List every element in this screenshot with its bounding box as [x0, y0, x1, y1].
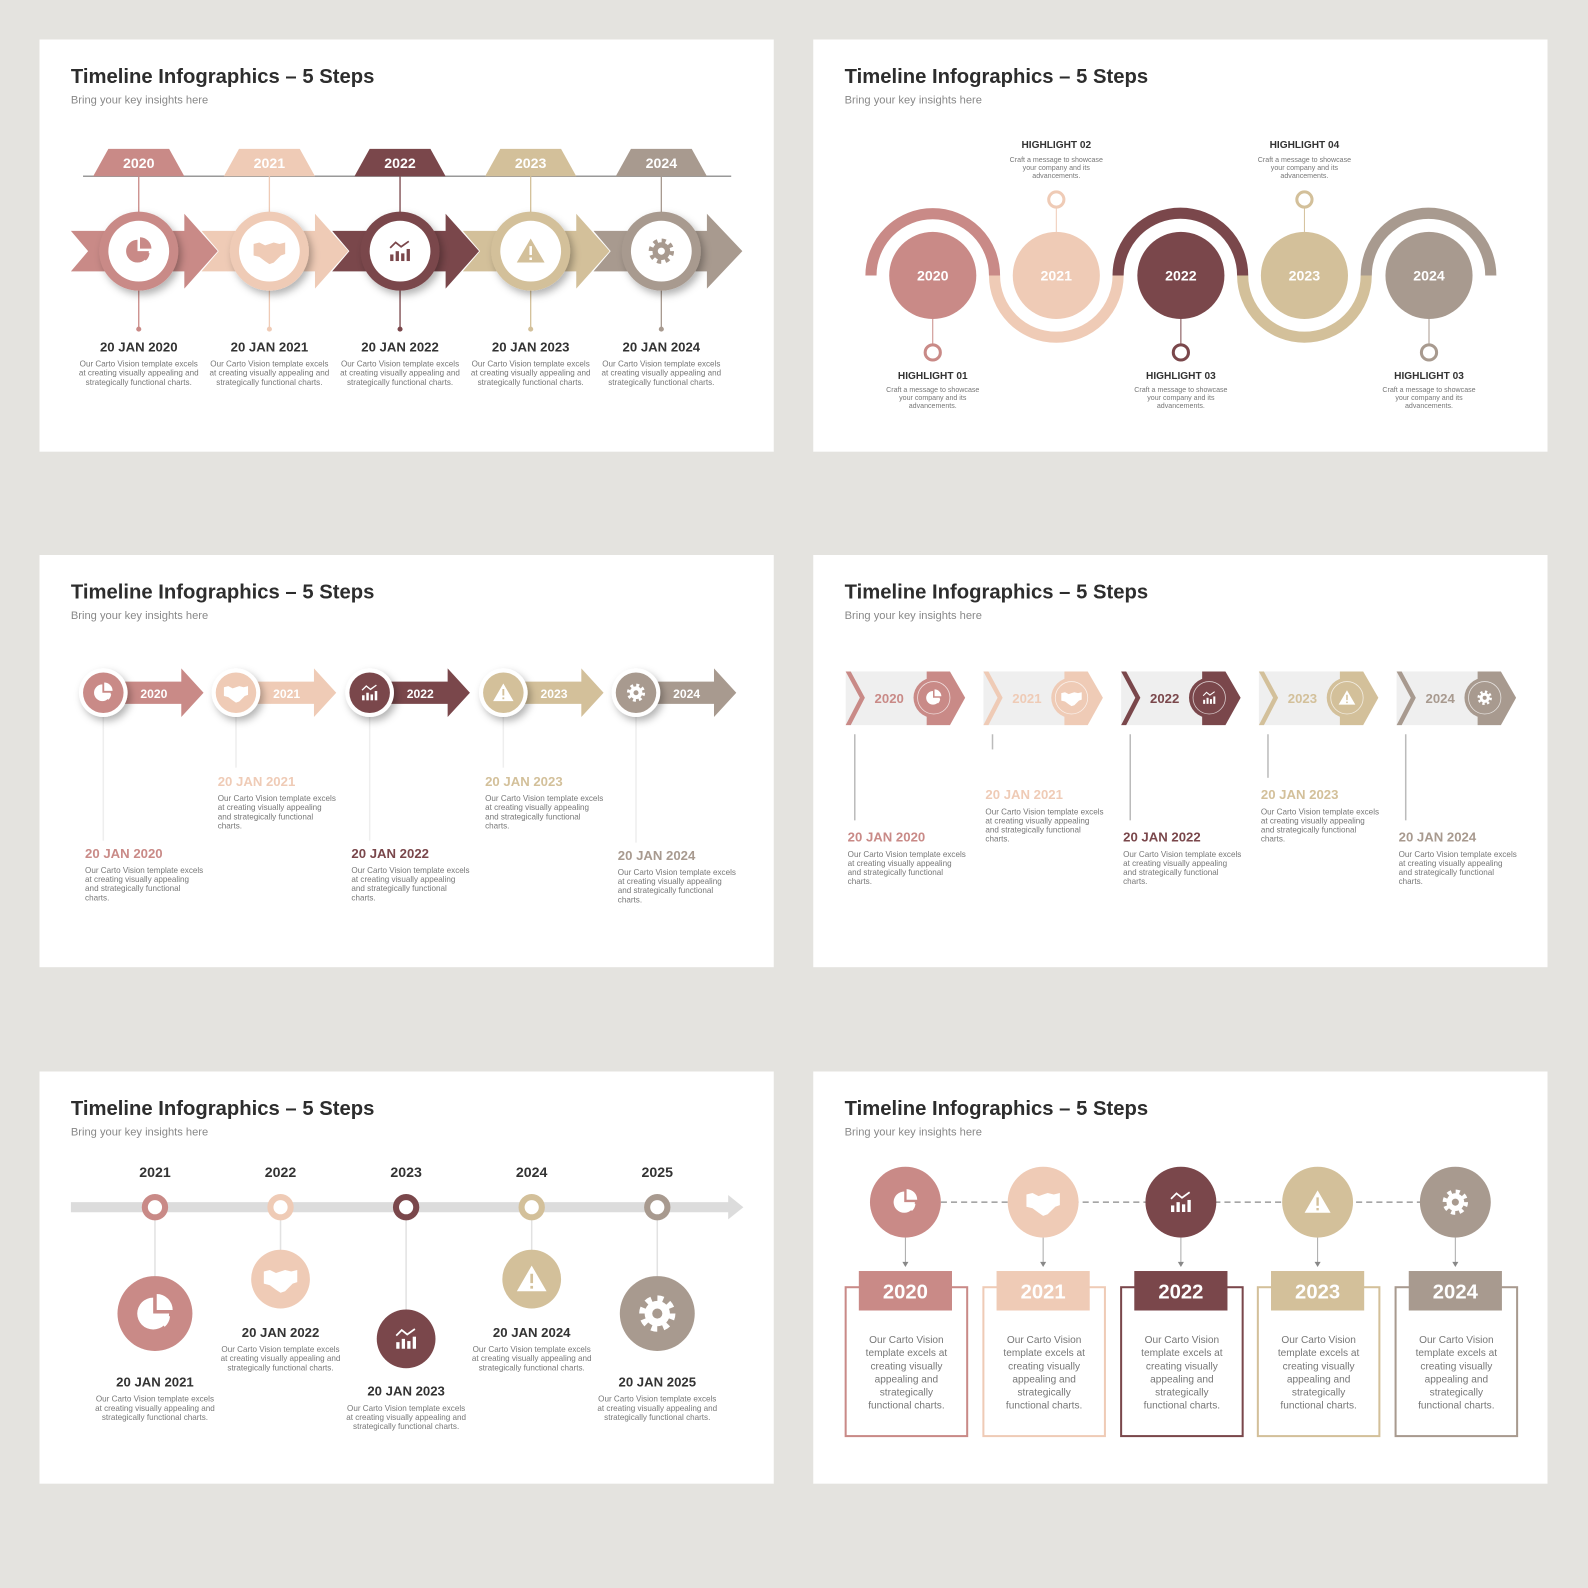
subtitle: Bring your key insights here	[71, 610, 208, 622]
step 2020: 2020	[140, 687, 168, 701]
step 2022: Our Carto Vision	[1145, 1335, 1219, 1346]
step 2023: Our Carto Vision	[1281, 1335, 1356, 1346]
step 2025: strategically functional charts.	[604, 1413, 710, 1422]
step 2022: charts.	[1123, 877, 1147, 886]
highlight 02: HIGHLIGHT 02	[1021, 140, 1092, 151]
step 2024: 20 JAN 2024	[493, 1325, 571, 1340]
step 2024: Our Carto Vision template excels	[602, 360, 720, 369]
step 2024	[593, 149, 742, 387]
step 2024	[472, 1165, 592, 1372]
highlight 03: 2022	[1165, 269, 1197, 285]
step 2022: creating visually	[1146, 1361, 1219, 1372]
step 2020: 20 JAN 2020	[100, 339, 178, 354]
step 2020: creating visually	[870, 1361, 943, 1372]
step 2022: 20 JAN 2022	[242, 1325, 319, 1340]
step 2021: 20 JAN 2021	[985, 787, 1063, 802]
step 2021: 20 JAN 2021	[231, 339, 308, 354]
step 2020: 20 JAN 2020	[85, 846, 163, 861]
step 2021	[983, 671, 1104, 844]
step 2024: Our Carto Vision	[1419, 1335, 1494, 1346]
step 2020: at creating visually appealing	[85, 875, 189, 884]
step 2023: 20 JAN 2023	[485, 774, 563, 789]
highlight 03	[1134, 232, 1228, 410]
step 2022: appealing and	[1150, 1374, 1214, 1385]
step 2020: and strategically functional	[85, 884, 181, 893]
title: Timeline Infographics – 5 Steps	[845, 1098, 1148, 1120]
step 2024: 2024	[646, 156, 677, 172]
step 2022: and strategically functional	[1123, 868, 1219, 877]
step 2024: 20 JAN 2024	[618, 848, 696, 863]
step 2020	[71, 149, 218, 387]
step 2022: Our Carto Vision template excels	[221, 1345, 340, 1354]
step 2020: Our Carto Vision template excels	[848, 850, 966, 859]
step 2021: Our Carto Vision template excels	[210, 360, 328, 369]
title: Timeline Infographics – 5 Steps	[845, 66, 1148, 88]
step 2020: Our Carto Vision template excels	[80, 360, 198, 369]
step 2021: 2021	[1021, 1281, 1066, 1303]
step 2021: Our Carto Vision template excels	[96, 1395, 214, 1404]
step 2020: 20 JAN 2020	[848, 830, 925, 845]
panel: chevron tabs	[813, 555, 1547, 967]
step 2020: charts.	[85, 893, 109, 902]
step 2021: at creating visually appealing	[985, 816, 1089, 825]
step 2022	[1121, 1167, 1243, 1436]
step 2023	[463, 149, 610, 387]
step 2024: 2024	[1433, 1281, 1479, 1303]
step 2023: 20 JAN 2023	[1261, 787, 1338, 802]
step 2024: appealing and	[1425, 1374, 1488, 1385]
highlight 02: your company and its	[1023, 164, 1090, 172]
highlight 02: advancements.	[1032, 172, 1080, 180]
highlight 02: Craft a message to showcase	[1010, 156, 1103, 164]
step 2024: Our Carto Vision template excels	[618, 868, 736, 877]
subtitle: Bring your key insights here	[845, 610, 982, 622]
step 2024: 2024	[516, 1165, 548, 1181]
step 2023: charts.	[1261, 835, 1285, 844]
step 2023: charts.	[485, 821, 509, 830]
step 2023: 2023	[1295, 1281, 1340, 1303]
highlight 03: HIGHLIGHT 03	[1146, 371, 1216, 382]
title: Timeline Infographics – 5 Steps	[845, 582, 1148, 604]
step 2021: 2021	[254, 156, 285, 172]
subtitle: Bring your key insights here	[71, 94, 208, 106]
highlight 01: HIGHLIGHT 01	[898, 371, 968, 382]
step 2022: at creating visually appealing and	[340, 369, 460, 378]
step 2022: 20 JAN 2022	[351, 846, 429, 861]
highlight 04: 2023	[1289, 269, 1320, 285]
step 2020	[846, 671, 966, 886]
step 2020: strategically	[880, 1388, 934, 1399]
step 2021: charts.	[985, 835, 1010, 844]
track arrow	[71, 1195, 743, 1219]
step 2020: at creating visually appealing and	[79, 369, 199, 378]
panel: circle arrows	[39, 555, 774, 967]
step 2022: 2022	[265, 1165, 296, 1181]
step 2021: 20 JAN 2021	[218, 774, 295, 789]
step 2023: functional charts.	[1280, 1401, 1357, 1412]
step 2024: 20 JAN 2024	[623, 339, 701, 354]
highlight 04: Craft a message to showcase	[1258, 156, 1351, 164]
panel: arrow timeline	[39, 39, 774, 452]
step 2022: functional charts.	[1144, 1401, 1220, 1412]
step 2024: at creating visually appealing	[618, 877, 722, 886]
highlight 04: your company and its	[1271, 164, 1339, 172]
step 2021: appealing and	[1012, 1374, 1076, 1385]
step 2024: Our Carto Vision template excels	[1399, 850, 1517, 859]
step 2022	[345, 668, 470, 902]
step 2024: strategically functional charts.	[608, 378, 714, 387]
highlight 02	[1010, 140, 1103, 319]
step 2023: 2023	[390, 1165, 422, 1181]
step 2021: Our Carto Vision	[1007, 1335, 1081, 1346]
step 2021: at creating visually appealing	[218, 803, 322, 812]
step 2023: Our Carto Vision template excels	[1261, 807, 1379, 816]
step 2023: and strategically functional	[485, 812, 581, 821]
highlight 01	[886, 232, 979, 410]
step 2024: creating visually	[1420, 1361, 1493, 1372]
subtitle: Bring your key insights here	[71, 1126, 208, 1138]
step 2024	[1397, 671, 1517, 886]
step 2023: 2023	[515, 156, 547, 172]
panel: track timeline	[39, 1072, 774, 1484]
step 2020: at creating visually appealing	[848, 859, 952, 868]
step 2022: 2022	[1150, 691, 1179, 706]
step 2021: Our Carto Vision template excels	[985, 807, 1104, 816]
step 2020: Our Carto Vision template excels	[85, 866, 203, 875]
step 2020: 2020	[875, 691, 904, 706]
step 2022: 2022	[407, 687, 434, 701]
step 2024: template excels at	[1416, 1348, 1497, 1359]
step 2024: charts.	[1399, 877, 1423, 886]
highlight 05: Craft a message to showcase	[1382, 386, 1476, 394]
highlight 05: advancements.	[1405, 402, 1453, 410]
step 2023: at creating visually appealing	[485, 803, 589, 812]
step 2024: and strategically functional	[1399, 868, 1494, 877]
step 2022: Our Carto Vision template excels	[351, 866, 470, 875]
subtitle: Bring your key insights here	[845, 1126, 982, 1138]
step 2020: template excels at	[866, 1348, 947, 1359]
step 2021: strategically	[1017, 1388, 1072, 1399]
step 2022: and strategically functional	[351, 884, 447, 893]
step 2021: 2021	[273, 687, 300, 701]
step 2022: at creating visually appealing and	[221, 1354, 340, 1363]
step 2020: appealing and	[875, 1374, 938, 1385]
step 2022: strategically	[1155, 1388, 1210, 1399]
step 2022: 2022	[1158, 1281, 1203, 1303]
step 2023: 20 JAN 2023	[367, 1384, 445, 1399]
step 2024	[612, 668, 736, 904]
step 2025: 20 JAN 2025	[619, 1374, 696, 1389]
step 2023: strategically functional charts.	[478, 378, 584, 387]
step 2022: Our Carto Vision template excels	[1123, 850, 1241, 859]
step 2024: strategically	[1430, 1388, 1484, 1399]
step 2023: creating visually	[1283, 1361, 1356, 1372]
step 2021: at creating visually appealing and	[95, 1404, 215, 1413]
step 2021: template excels at	[1003, 1348, 1085, 1359]
step 2022: strategically functional charts.	[347, 378, 453, 387]
highlight 05: HIGHLIGHT 03	[1394, 371, 1464, 382]
step 2025	[597, 1165, 717, 1422]
step 2024: strategically functional charts.	[479, 1363, 585, 1372]
step 2022	[221, 1165, 340, 1372]
step 2024: at creating visually appealing and	[601, 369, 721, 378]
step 2021: charts.	[218, 821, 242, 830]
step 2023: 2023	[540, 687, 568, 701]
step 2023: at creating visually appealing and	[471, 369, 591, 378]
step 2024: 2024	[673, 687, 700, 701]
step 2023	[346, 1165, 466, 1431]
panel: boxed steps	[813, 1072, 1547, 1484]
step 2023: strategically functional charts.	[353, 1422, 459, 1431]
step 2024: charts.	[618, 895, 642, 904]
step 2024: 2024	[1426, 691, 1455, 706]
step 2020: strategically functional charts.	[86, 378, 192, 387]
highlight 05: your company and its	[1395, 394, 1463, 402]
step 2023: at creating visually appealing	[1261, 816, 1365, 825]
step 2023	[1259, 671, 1379, 844]
step 2021: 2021	[139, 1165, 171, 1181]
step 2023: at creating visually appealing and	[346, 1413, 466, 1422]
step 2023: appealing and	[1287, 1374, 1350, 1385]
highlight 01: 2020	[917, 269, 949, 285]
step 2025: at creating visually appealing and	[597, 1404, 717, 1413]
step 2020: charts.	[848, 877, 872, 886]
step 2023: and strategically functional	[1261, 825, 1356, 834]
step 2021	[212, 668, 336, 830]
step 2021: 2021	[1012, 691, 1042, 706]
step 2022: at creating visually appealing	[1123, 859, 1227, 868]
subtitle: Bring your key insights here	[845, 94, 982, 106]
step 2022: 20 JAN 2022	[1123, 830, 1201, 845]
step 2021: creating visually	[1008, 1361, 1081, 1372]
step 2023	[479, 668, 604, 830]
step 2021: and strategically functional	[985, 825, 1081, 834]
step 2021	[202, 149, 348, 387]
step 2023: 20 JAN 2023	[492, 339, 569, 354]
step 2022	[1121, 671, 1241, 886]
highlight 04: HIGHLIGHT 04	[1270, 140, 1340, 151]
step 2023: Our Carto Vision template excels	[347, 1404, 465, 1413]
step 2021	[983, 1167, 1105, 1436]
step 2022: charts.	[351, 893, 376, 902]
step 2022: template excels at	[1141, 1348, 1223, 1359]
wave arcs	[871, 213, 1491, 337]
highlight 02: 2021	[1041, 269, 1072, 285]
step 2021: 20 JAN 2021	[116, 1374, 194, 1389]
step 2021: strategically functional charts.	[102, 1413, 208, 1422]
step 2023: template excels at	[1278, 1348, 1360, 1359]
highlight 04	[1258, 140, 1351, 319]
title: Timeline Infographics – 5 Steps	[71, 66, 374, 88]
step 2024: 20 JAN 2024	[1399, 830, 1477, 845]
step 2020: 2020	[883, 1281, 928, 1303]
step 2020: and strategically functional	[848, 868, 943, 877]
step 2023	[1258, 1167, 1379, 1436]
step 2021: strategically functional charts.	[216, 378, 322, 387]
step 2024	[1396, 1167, 1517, 1436]
step 2023: Our Carto Vision template excels	[472, 360, 590, 369]
step 2021: functional charts.	[1006, 1401, 1082, 1412]
step 2022: strategically functional charts.	[227, 1363, 334, 1372]
highlight 04: advancements.	[1280, 172, 1328, 180]
highlight 03: Craft a message to showcase	[1134, 386, 1228, 394]
panel: wave highlights	[813, 39, 1547, 452]
highlight 03: your company and its	[1147, 394, 1215, 402]
step 2024: and strategically functional	[618, 886, 713, 895]
highlight 05	[1382, 232, 1476, 410]
step 2024: functional charts.	[1418, 1401, 1495, 1412]
step 2021: Our Carto Vision template excels	[218, 794, 336, 803]
highlight 03: advancements.	[1157, 402, 1205, 410]
step 2023: strategically	[1292, 1388, 1346, 1399]
title: Timeline Infographics – 5 Steps	[71, 582, 374, 604]
step 2021	[95, 1165, 215, 1422]
step 2025: 2025	[642, 1165, 673, 1181]
step 2022: 20 JAN 2022	[361, 339, 439, 354]
step 2020	[79, 668, 204, 902]
highlight 05: 2024	[1413, 269, 1445, 285]
title: Timeline Infographics – 5 Steps	[71, 1098, 374, 1120]
step 2024: Our Carto Vision template excels	[473, 1345, 591, 1354]
highlight 01: advancements.	[909, 402, 957, 410]
step 2020	[846, 1167, 967, 1436]
highlight 01: your company and its	[899, 394, 967, 402]
step 2022: 2022	[384, 156, 416, 172]
step 2021: and strategically functional	[218, 812, 313, 821]
highlight 01: Craft a message to showcase	[886, 386, 979, 394]
step 2022: Our Carto Vision template excels	[341, 360, 459, 369]
step 2020: functional charts.	[868, 1401, 945, 1412]
step 2021: at creating visually appealing and	[210, 369, 329, 378]
step 2023: 2023	[1288, 691, 1317, 706]
step 2020: Our Carto Vision	[869, 1335, 944, 1346]
step 2024: at creating visually appealing	[1399, 859, 1503, 868]
step 2025: Our Carto Vision template excels	[598, 1395, 716, 1404]
step 2020: 2020	[123, 156, 155, 172]
step 2022: at creating visually appealing	[351, 875, 455, 884]
step 2022	[332, 149, 479, 387]
step 2024: at creating visually appealing and	[472, 1354, 592, 1363]
step 2023: Our Carto Vision template excels	[485, 794, 603, 803]
